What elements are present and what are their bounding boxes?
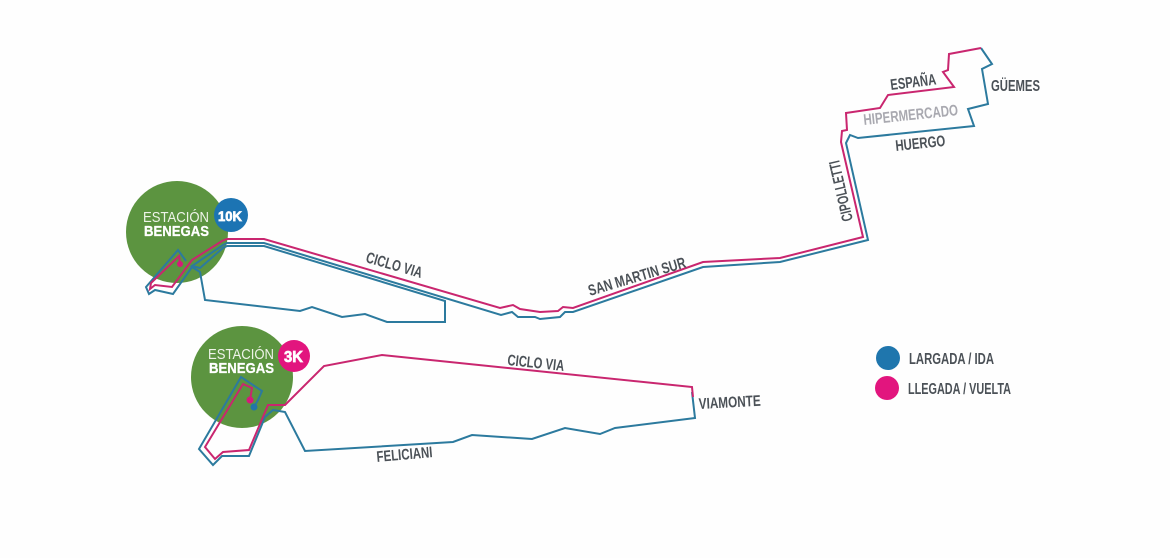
label: España: ESPAÑA <box>889 70 937 94</box>
route: 10K outbound <box>146 48 992 322</box>
badge: 10K: 10K <box>218 208 242 224</box>
label: Cipolletti: CIPOLLETTI <box>826 159 857 223</box>
route: 3K outbound <box>199 377 695 465</box>
station name 3K <box>208 346 274 377</box>
station name 3K: BENEGAS <box>209 360 274 377</box>
legend item: largada / ida: LARGADA / IDA <box>909 351 994 368</box>
label: Güemes: GÜEMES <box>991 78 1040 95</box>
station circle 10K <box>126 181 228 283</box>
badge: 3K <box>278 340 310 372</box>
label: Ciclo Via 3K: CICLO VIA <box>507 352 565 375</box>
station name 10K: BENEGAS <box>144 223 209 240</box>
station name 10K: ESTACIÓN <box>143 209 209 226</box>
start dot 3K outbound <box>250 404 258 410</box>
badge: 10K <box>214 198 248 232</box>
station name 3K: ESTACIÓN <box>208 346 274 363</box>
route: 10K return <box>150 48 981 312</box>
label: Hipermercado: HIPERMERCADO <box>863 102 959 129</box>
route: 3K return <box>205 355 693 459</box>
start dot 3K return <box>246 396 254 404</box>
station circle 3K <box>191 326 293 428</box>
station name 10K <box>143 209 209 240</box>
legend <box>875 346 1011 400</box>
panel: 3K route <box>191 326 761 466</box>
panel: 10K route <box>126 48 1040 322</box>
badge: 3K: 3K <box>284 349 303 366</box>
legend item: llegada / vuelta: LLEGADA / VUELTA <box>908 381 1011 398</box>
start dot 10K <box>177 261 183 267</box>
label: Huergo: HUERGO <box>895 133 946 155</box>
label: Ciclo Via: CICLO VIA <box>364 250 424 282</box>
label: San Martin Sur: SAN MARTIN SUR <box>586 255 688 300</box>
label: Viamonte: VIAMONTE <box>698 393 761 413</box>
label: Feliciani: FELICIANI <box>376 444 433 466</box>
